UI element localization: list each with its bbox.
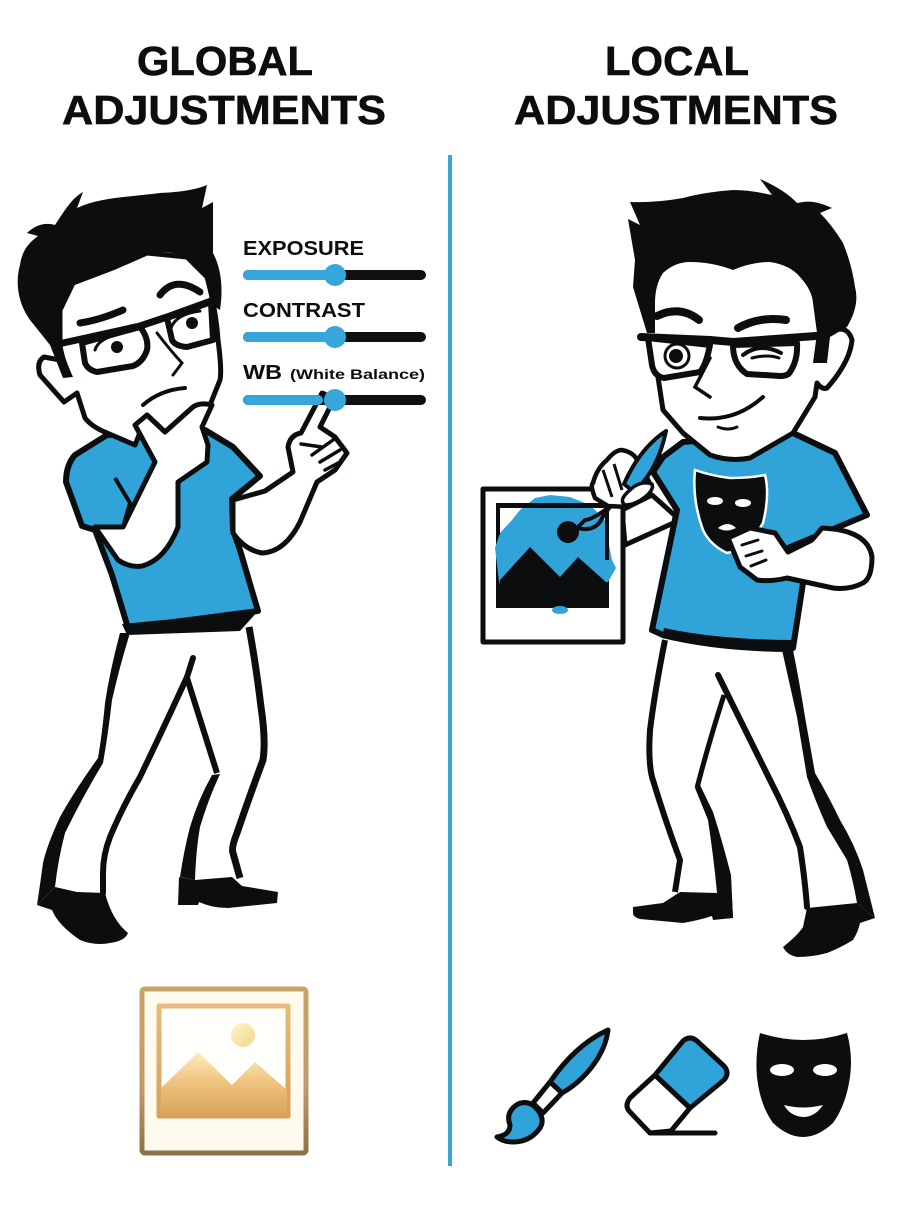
left figure pointing arm	[233, 393, 347, 553]
left figure glasses	[63, 301, 213, 372]
right figure hair	[628, 179, 856, 363]
left figure face	[39, 253, 221, 445]
paintbrush in hand	[577, 431, 666, 529]
slider: white balance	[243, 362, 426, 411]
right figure face	[655, 262, 852, 459]
title: local adjustments	[514, 38, 838, 133]
left figure pants	[37, 627, 278, 944]
left figure hair	[18, 185, 222, 378]
left figure waistband	[122, 611, 258, 635]
right figure glasses	[641, 336, 816, 378]
slider: contrast	[243, 300, 426, 348]
slider: exposure: EXPOSURE	[243, 238, 364, 260]
left figure chin hand arm	[95, 404, 212, 566]
icon: paintbrush	[497, 1030, 608, 1142]
title: global adjustments: GLOBAL	[137, 38, 313, 84]
slider: white balance: (White Balance)	[290, 366, 425, 382]
right figure waistband	[662, 628, 796, 652]
icon: eraser	[627, 1038, 727, 1133]
slider: exposure	[243, 238, 426, 286]
right figure eyes and expression	[657, 311, 786, 429]
slider: white balance: WB	[243, 362, 282, 384]
icon: theater mask	[756, 1033, 851, 1137]
held photo with painted sky	[483, 489, 623, 642]
icon: global photo with warm gradient	[142, 989, 306, 1153]
shirt mask emblem	[694, 470, 767, 553]
sliders panel	[243, 238, 426, 411]
title: global adjustments: ADJUSTMENTS	[62, 87, 386, 133]
title: local adjustments: LOCAL	[605, 38, 749, 84]
right figure pants	[633, 640, 875, 957]
right figure mask hand and arm	[728, 528, 872, 588]
title: local adjustments: ADJUSTMENTS	[514, 87, 838, 133]
left figure t-shirt	[66, 430, 260, 628]
right figure t-shirt	[652, 433, 867, 648]
title: global adjustments	[62, 38, 386, 133]
character: local, winking	[483, 179, 875, 957]
character: global, thinking	[18, 185, 347, 944]
left figure eyes and expression	[80, 284, 200, 405]
slider: contrast: CONTRAST	[243, 300, 365, 322]
right figure back arm	[622, 495, 680, 545]
center divider	[448, 155, 452, 1166]
